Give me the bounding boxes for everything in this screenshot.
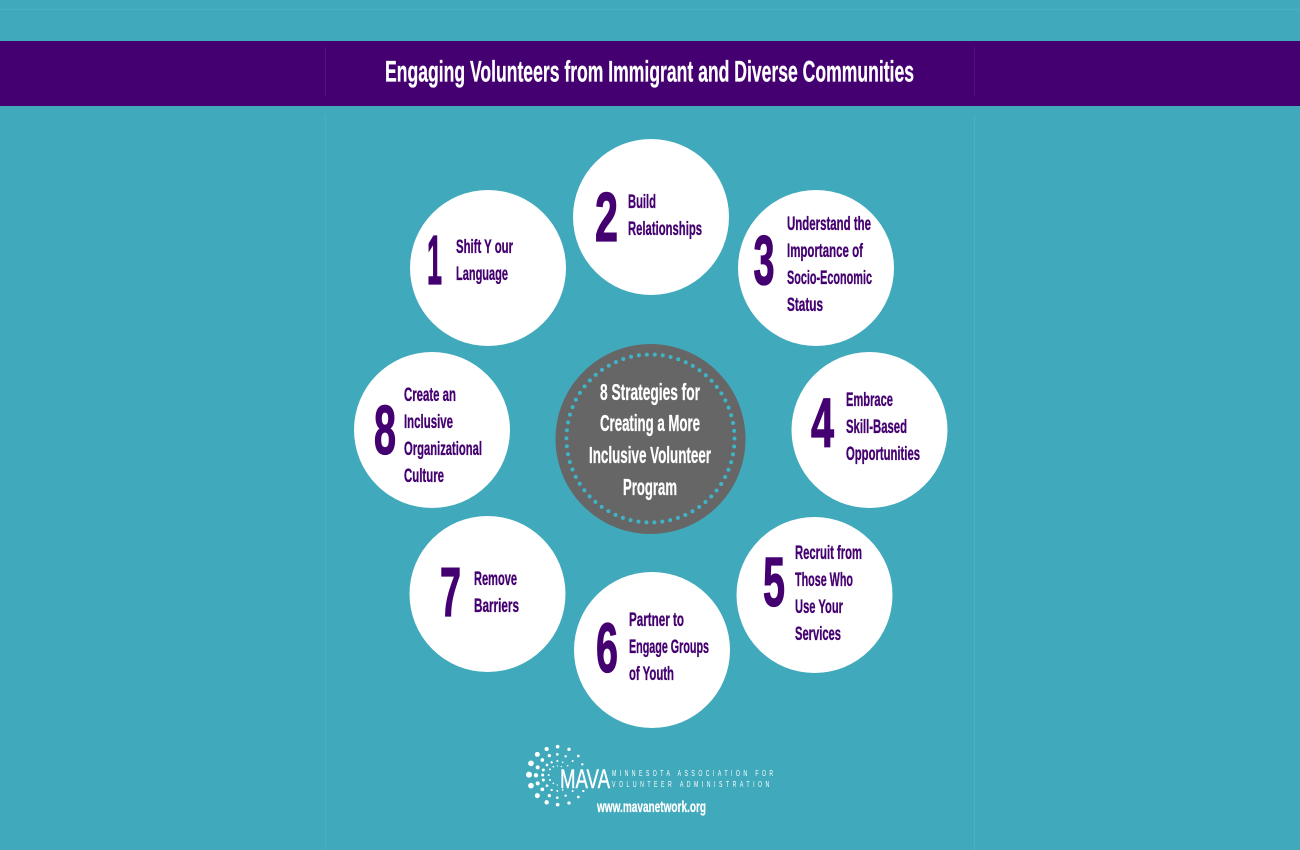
strategy 6: Engage Groups xyxy=(629,636,709,658)
central hub: Creating a More xyxy=(600,410,700,436)
strategy 1: Language xyxy=(456,263,508,285)
strategy 4: Embrace xyxy=(846,389,893,411)
strategy 3: Socio-Economic xyxy=(787,267,872,289)
strategy 6: Partner to xyxy=(629,609,684,631)
strategy 4 xyxy=(792,352,948,508)
strategy 5: 5 xyxy=(763,543,785,621)
strategy 8: 8 xyxy=(374,391,396,469)
title: Engaging Volunteers from Immigrant and Diverse Communities xyxy=(385,56,914,88)
logo organization name xyxy=(612,770,773,789)
icon: radial dots xyxy=(526,745,584,806)
strategy 8: Culture xyxy=(404,465,444,487)
central hub: Inclusive Volunteer xyxy=(589,442,711,468)
strategy 5: Recruit from xyxy=(795,542,862,564)
strategy 7: 7 xyxy=(440,553,461,631)
strategy 5: Use Your xyxy=(795,596,843,618)
strategy 4: Opportunities xyxy=(846,443,920,465)
strategy 8 xyxy=(354,352,510,508)
website URL: www.mavanetwork.org xyxy=(596,799,706,816)
logo wordmark: MAVA xyxy=(560,764,610,794)
logo: MAVA xyxy=(526,745,773,816)
strategy 8: Organizational xyxy=(404,438,482,460)
strategy 7: Barriers xyxy=(474,595,519,617)
logo organization name: MINNESOTA ASSOCIATION FOR xyxy=(612,770,773,778)
strategy 1 xyxy=(410,190,566,346)
strategy 3: Status xyxy=(787,294,823,316)
strategy 3: Understand the xyxy=(787,213,871,235)
central hub: 8 Strategies for xyxy=(600,379,700,405)
strategy 3: Importance of xyxy=(787,240,863,262)
strategy 8: Inclusive xyxy=(404,411,453,433)
strategy 7: Remove xyxy=(474,568,517,590)
strategy 8: Create an xyxy=(404,384,456,406)
strategy 2: Build xyxy=(628,191,656,213)
strategy 4: 4 xyxy=(811,384,834,462)
strategy 6 xyxy=(574,572,730,728)
central hub xyxy=(556,344,746,534)
strategy 2: Relationships xyxy=(628,218,702,240)
logo organization name: VOLUNTEER ADMINISTRATION xyxy=(612,781,769,789)
strategy 5 xyxy=(736,517,892,673)
strategy 3: 3 xyxy=(754,221,774,299)
title banner xyxy=(0,41,1300,106)
strategy 2 xyxy=(573,139,729,295)
strategy 2: 2 xyxy=(595,178,618,256)
strategy 1: Shift Y our xyxy=(456,236,513,258)
strategy 5: Those Who xyxy=(795,569,853,591)
strategy 7 xyxy=(410,516,566,672)
strategy 6: 6 xyxy=(596,609,618,687)
strategy 1: 1 xyxy=(427,221,442,299)
strategy 3 xyxy=(738,190,894,346)
strategy 4: Skill-Based xyxy=(846,416,907,438)
central hub: Program xyxy=(623,474,677,500)
strategy 6: of Youth xyxy=(629,663,674,685)
strategy 5: Services xyxy=(795,623,841,645)
